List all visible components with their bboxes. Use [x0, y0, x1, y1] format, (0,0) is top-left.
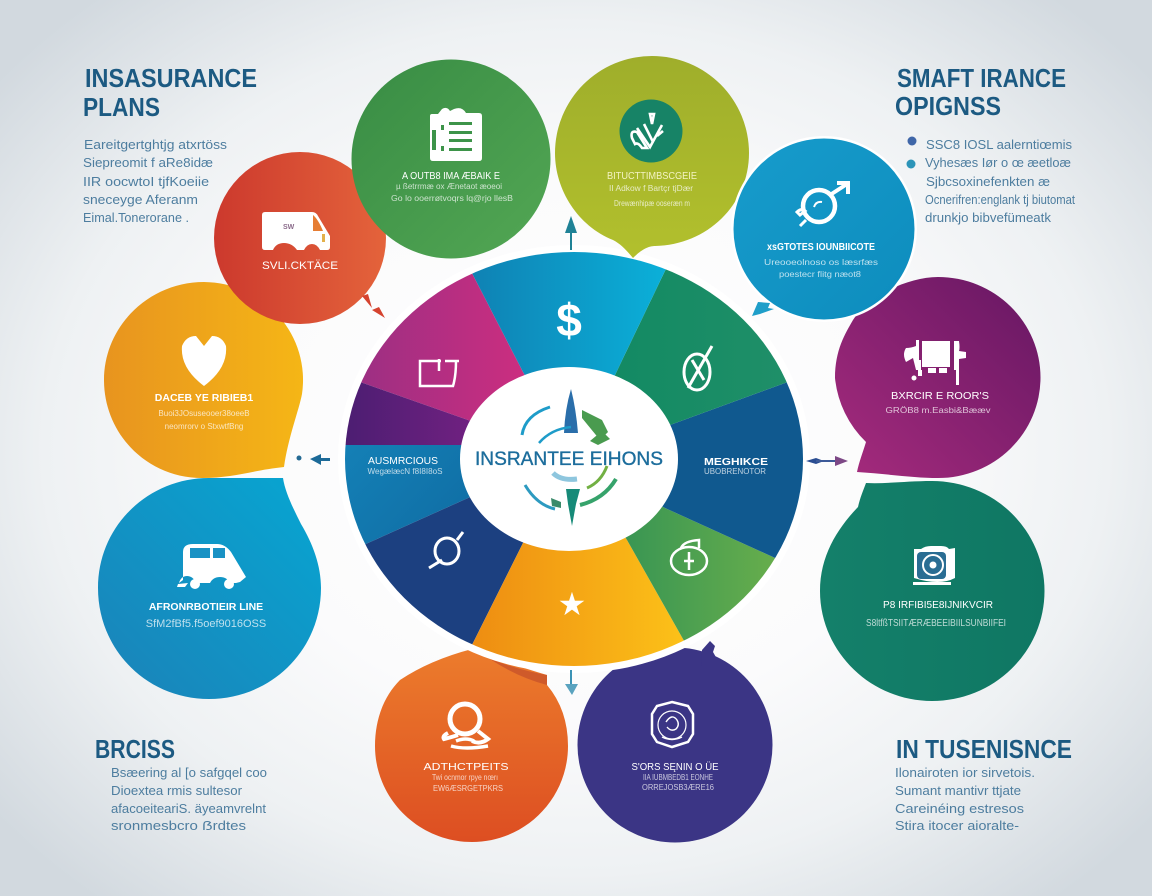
heading block: insurance plans: Siepreomit f aRe8idæ [83, 155, 213, 170]
hub title: INSRANTEE EIHONS [475, 448, 663, 470]
heading block: in tusenisnce: Sumant mantivr ttjate [895, 783, 1021, 798]
arrow: left [296, 454, 330, 465]
bubble: blue: xsGTOTES IOUNBIICOTE [767, 241, 875, 253]
icon: teal leaf [684, 346, 712, 390]
heading block: smart options: OPIGNSS [895, 93, 1001, 121]
heading block: smart options [895, 65, 1075, 225]
bubble: teal: S8ltfßTSIITÆRÆBEEIBIILSUNBIIFEI [866, 618, 1006, 629]
segment: magenta [361, 274, 525, 421]
bubble: lime: BITUCTTIMBSCGEIE [607, 170, 697, 182]
bubble: amber: Buoi3JOsuseooer38oeeB [158, 409, 250, 418]
bubble: orange: Twi ocnmor rpye nœrı [432, 773, 498, 782]
bubble: amber: DACEB YE RIBIEB1 [155, 392, 253, 404]
bubble: green: µ ßetrrmæ ox Ænetaot æoeoi [396, 182, 502, 191]
bubble: purple [835, 277, 1040, 478]
heading block: smart options: Ocnerifren:englank tj biutomat [925, 192, 1075, 207]
icon: heart shield [182, 336, 226, 386]
segment: blue [345, 445, 470, 544]
icon: money bag [671, 540, 707, 575]
heading block: in tusenisnce: Ilonairoten ior sirvetois. [895, 765, 1035, 780]
heading block: insurance plans: IIR oocwtoI tjfKoeiie [83, 174, 209, 189]
bubble: blue: Ureooeolnoso os læsrfæs [764, 258, 878, 267]
accent: fold shade [490, 659, 547, 685]
arrow: top [565, 216, 577, 250]
bubble: red [214, 152, 386, 324]
segment: green [626, 506, 775, 640]
bubble: lime [555, 56, 749, 258]
heading block: smart options: SMAFT IRANCE [897, 65, 1066, 93]
heading block: smart options: Vyhesæs Iør o œ æetloæ [925, 155, 1071, 170]
icon: target arrow [797, 183, 848, 226]
segment: cyan [472, 252, 666, 376]
segment label: right: UBOBRENOTOR [704, 467, 766, 476]
bubble: blue car: SfM2fBf5.f5oef9016OSS [146, 618, 266, 630]
segment label: right [704, 456, 768, 476]
bubble: blue car [98, 478, 321, 699]
heading block: smart options: Sjbcsoxinefenkten æ [926, 174, 1050, 189]
bubble: teal: P8 IRFIBI5E8IJNIKVCIR [883, 599, 993, 611]
center hub [460, 367, 678, 551]
heading block: smart options: drunkjo bibvefümeatk [925, 210, 1052, 225]
segment label: left: AUSMRCIOUS [368, 455, 438, 467]
heading block: smart options: SSC8 IOSL aalerntiœmis [926, 137, 1072, 152]
bubble: green: Go lo ooerrøtvoqrs lq@rjo llesB [391, 194, 513, 203]
bubble: blue: poestecr flitg næot8 [779, 270, 862, 279]
heading block: brciss: BRCISS [95, 736, 175, 764]
icon: compass logo [522, 389, 616, 526]
heading block: insurance plans: Eimal.Tonerorane . [83, 210, 189, 225]
heading block: in tusenisnce: Careinéing estresos [895, 801, 1025, 816]
heading block: insurance plans: Eareitgertghtjg atxrtöss [84, 137, 228, 152]
bubble: orange [375, 649, 568, 842]
icon: hexagon badge [652, 702, 693, 747]
icon: truck [262, 212, 330, 250]
bubble: green [352, 60, 550, 258]
bubble: amber [104, 282, 303, 478]
icon: car [177, 544, 246, 589]
heading block: brciss: Dioextea rmis sultesor [111, 783, 243, 798]
wheel chart [345, 252, 803, 666]
bubble: indigo [578, 641, 772, 842]
heading block: in tusenisnce: IN TUSENISNCE [896, 736, 1072, 764]
segment label: right: MEGHIKCE [704, 456, 768, 468]
icon: magnifier [444, 704, 488, 748]
segment: dark blue [662, 382, 803, 558]
arrow: red tail [362, 294, 385, 318]
bubble: indigo: ORREJOSB3ÆRE16 [642, 783, 715, 792]
arrow: right [806, 456, 848, 466]
heading block: brciss: sronmesbcro ẞrdtes [111, 818, 247, 833]
heading block: brciss: afacoeiteariS. äyeamvrelnt [111, 801, 266, 816]
icon: teal leaf badge [620, 100, 682, 162]
bubble: purple: GRÖB8 m.Easbi&Bææv [886, 406, 990, 415]
icon: magenta tablet [420, 359, 459, 386]
heading block: insurance plans: sneceyge Aferanm [83, 192, 198, 207]
wheel halo [338, 245, 810, 673]
bubble: amber: neomrorv o StxwtfBng [165, 422, 243, 431]
heading block: insurance plans: PLANS [83, 94, 160, 122]
icon: star: ★ [558, 586, 586, 622]
bubble: red: SW [283, 224, 295, 231]
segment: orange [472, 538, 684, 666]
bubble: blue [731, 136, 917, 322]
heading block: brciss [95, 736, 267, 833]
heading block: insurance plans: INSASURANCE [85, 65, 257, 93]
bubble: blue car: AFRONRBOTIEIR LINE [149, 601, 263, 613]
bubble: green: A OUTB8 IMA ÆBAIK E [402, 170, 500, 182]
segment: teal [614, 269, 787, 425]
bubble: teal [820, 481, 1044, 701]
heading block: insurance plans [83, 65, 257, 225]
bubble: lime: Drewænhipæ ooseræn m [614, 199, 690, 208]
icon: navy wrench [429, 532, 463, 568]
arrow: blue tail [752, 302, 774, 316]
segment: purple [346, 382, 470, 445]
heading block: in tusenisnce: Stira itocer aioralte- [895, 818, 1019, 833]
bubble: orange: EW6ÆSRGETPKRS [433, 784, 503, 793]
bubble: indigo: S'ORS SĘNIN O ÜE [632, 761, 718, 773]
heading block: in tusenisnce [895, 736, 1072, 833]
segment label: left [368, 455, 442, 476]
icon: monitor machine [904, 340, 966, 385]
icon: dollar: $ [556, 294, 582, 346]
heading block: brciss: Bsæering al [o safgqel coo [111, 765, 267, 780]
bubble: red: SVLI.CKTÄCE [262, 260, 338, 272]
bubble: lime: II Adkow f Bartçr tjDær [609, 184, 693, 193]
arrow: bottom [565, 670, 578, 695]
icon: camera [913, 546, 955, 585]
segment label: left: WegælæcN f8I8I8oS [368, 467, 442, 476]
icon: checklist [430, 108, 482, 161]
bubble: indigo: IIA IUBMBEDB1 EONHE [643, 773, 713, 782]
segment: navy [365, 497, 524, 644]
bubble: orange: ADTHCTPEITS [424, 761, 508, 773]
bubble: purple: BXRCIR E ROOR'S [891, 390, 989, 402]
